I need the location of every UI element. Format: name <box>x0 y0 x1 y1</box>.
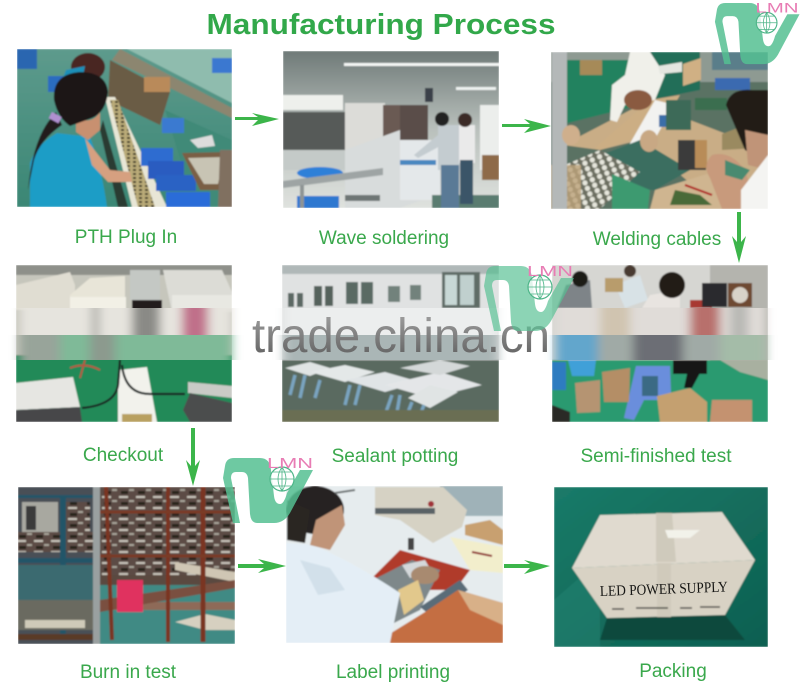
photo: semi-finished test <box>552 265 768 422</box>
arrow: step 7 to 8 <box>238 559 286 573</box>
logo: LMN lower: LMN <box>267 455 313 472</box>
arrow: step 2 to 3 <box>502 119 551 133</box>
logo: LMN middle: LMN <box>527 263 573 280</box>
photo: burn in test <box>18 487 235 644</box>
photo: packing <box>554 487 768 647</box>
photo: label printing <box>286 486 503 643</box>
photo: sealant potting <box>282 265 499 422</box>
title: Manufacturing Process <box>206 9 556 41</box>
caption: Packing: Packing <box>639 661 707 682</box>
watermark band: blurred strip and trade china text: trade.china.cn <box>252 310 550 363</box>
photo: wave soldering <box>283 51 499 208</box>
photo: welding cables <box>551 52 768 209</box>
photo: PTH plug in <box>17 49 232 207</box>
logo: LMN top right <box>715 0 800 64</box>
arrow: step 1 to 2 <box>235 113 279 126</box>
photo: checkout <box>16 265 232 422</box>
caption: Checkout: Checkout <box>83 445 164 466</box>
caption: Wave soldering: Wave soldering <box>319 228 449 249</box>
logo: LMN lower <box>223 455 313 523</box>
arrow: step 3 to 4 <box>732 212 746 263</box>
photo: packing: LED POWER SUPPLY <box>600 580 728 600</box>
arrow: step 8 to 9 <box>504 560 550 574</box>
caption: Semi-finished test: Semi-finished test <box>580 446 732 467</box>
caption: Sealant potting: Sealant potting <box>332 446 458 467</box>
arrow: step 4 to 5 <box>186 428 200 486</box>
watermark band: blurred strip and trade china text <box>20 300 766 370</box>
caption: PTH Plug In: PTH Plug In <box>75 227 177 248</box>
caption: Label printing: Label printing <box>336 662 450 683</box>
logo: LMN middle <box>484 263 574 331</box>
caption: Burn in test: Burn in test <box>80 662 177 683</box>
caption: Welding cables: Welding cables <box>593 229 721 250</box>
